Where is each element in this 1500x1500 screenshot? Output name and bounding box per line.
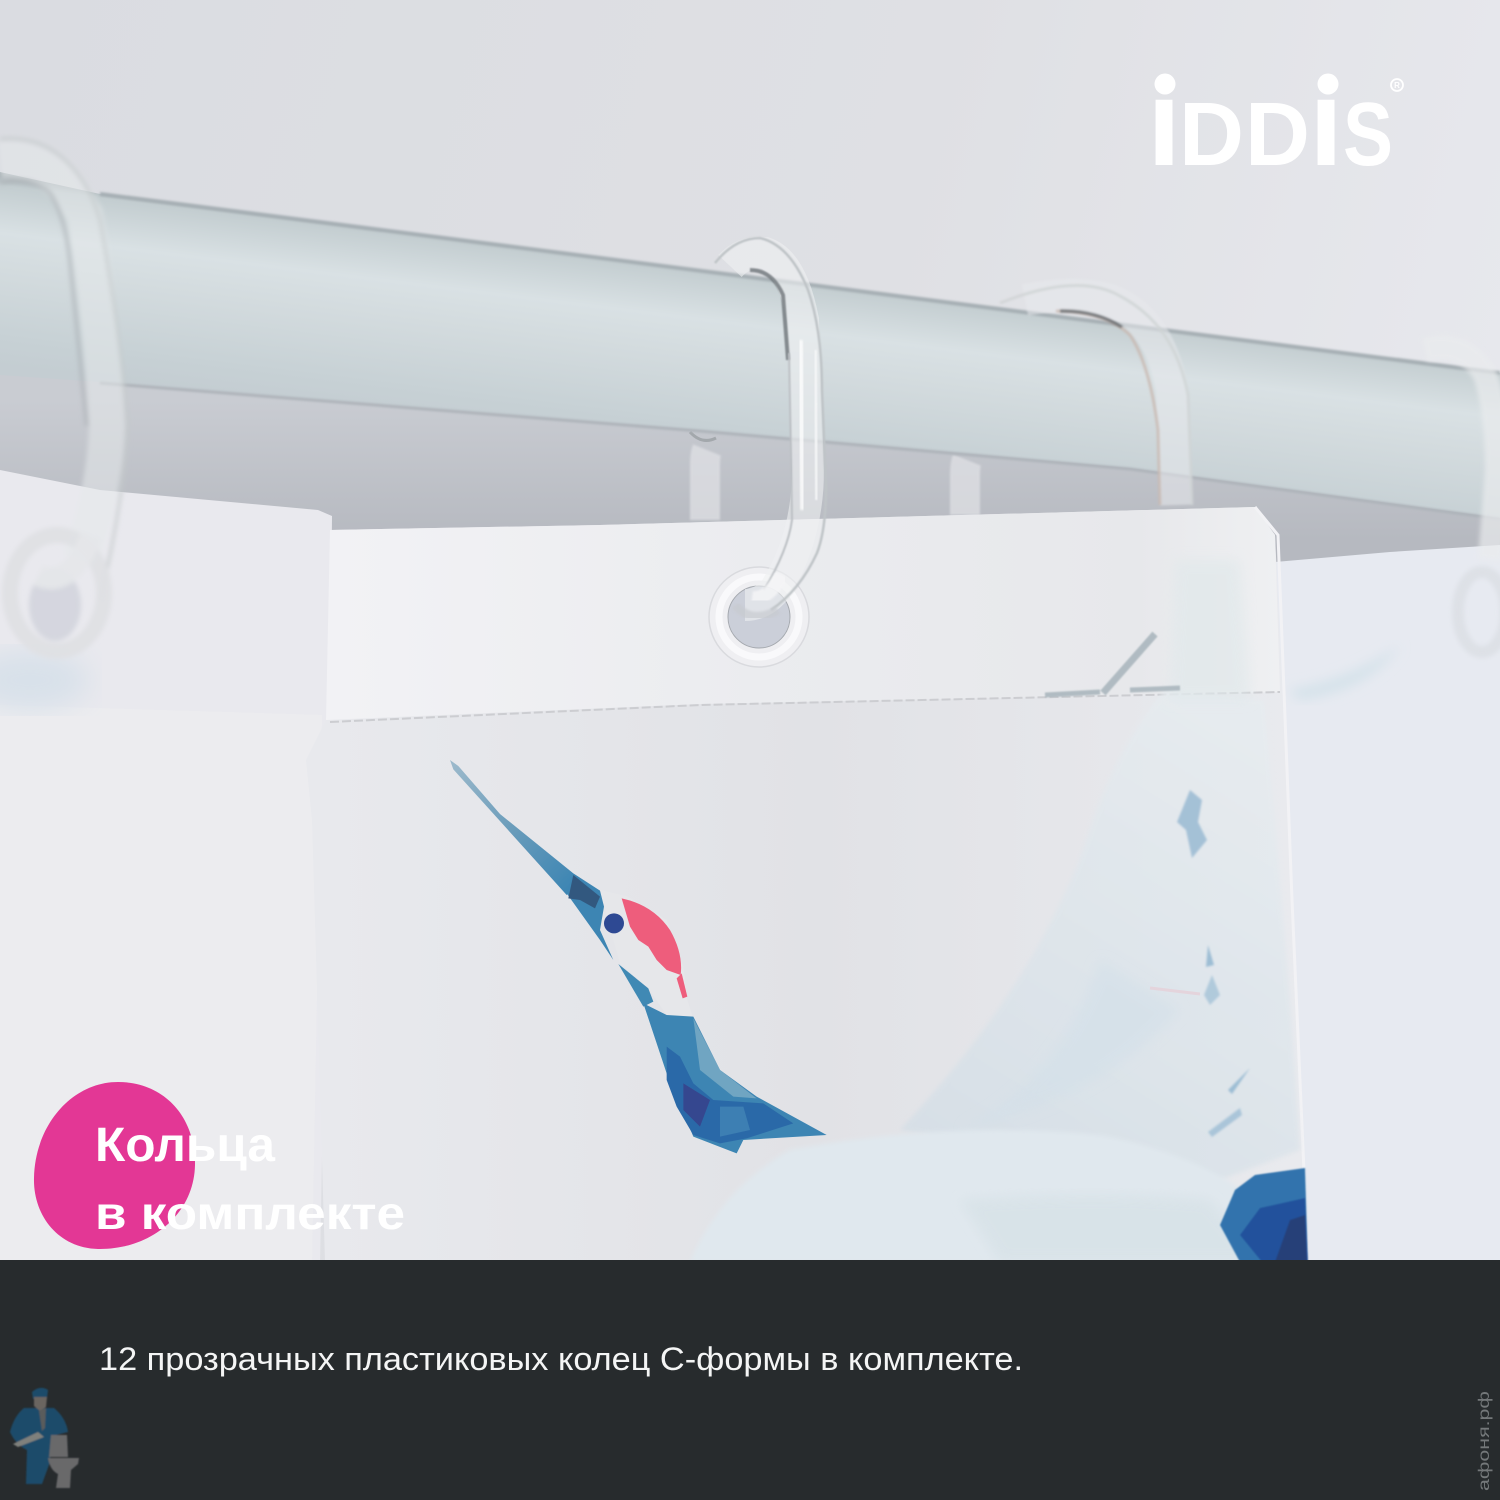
watermark: афоня.рф [1476, 1391, 1493, 1491]
logo: iDDiS: i [1309, 55, 1343, 192]
back ring hidden tip [690, 432, 716, 440]
crane wing tip print [1220, 1168, 1308, 1262]
lower neck [643, 1003, 827, 1153]
heading: rings included: Кольца [95, 1119, 275, 1172]
left grommet [10, 535, 104, 651]
crane head and neck [450, 760, 827, 1153]
left strip of head [567, 873, 613, 960]
crane body [690, 1130, 1305, 1262]
background curtain left [0, 470, 332, 1265]
ring: left blurred [0, 138, 128, 651]
background curtain right [1275, 545, 1500, 1265]
ring: main front [715, 238, 826, 616]
plumber [10, 1388, 68, 1484]
description text: 12 прозрачных пластиковых колец С-формы в комплекте. [99, 1341, 1023, 1377]
eye [604, 913, 624, 933]
print: wing [690, 560, 1305, 1262]
pink blob [34, 1082, 195, 1249]
logo: iDDiS: DD [1179, 85, 1310, 185]
red crest [622, 898, 681, 975]
icon: plumber with toilet [10, 1388, 79, 1488]
logo: iDDiS: R [1394, 81, 1400, 90]
wing shadow streaks [960, 960, 1180, 1130]
small ring ends behind the rod [705, 450, 967, 520]
main curtain [306, 507, 1308, 1262]
curtain rod [0, 172, 1500, 519]
dark blue lower neck patch [667, 1047, 793, 1143]
curtain hem [326, 507, 1280, 720]
hem stitching [330, 692, 1280, 722]
hem print mark [1045, 634, 1180, 695]
ring: right blurred [1425, 348, 1500, 652]
dark footer band [0, 1260, 1500, 1500]
pale head base [600, 890, 693, 1018]
logo: iDDiS: i [1147, 55, 1181, 192]
wing marks [1177, 790, 1250, 1137]
grommet: main ring [709, 567, 809, 667]
beak [450, 760, 575, 895]
heading: rings included: в комплекте [95, 1187, 405, 1239]
ring: third [1000, 286, 1192, 505]
heading: rings included [95, 1119, 405, 1239]
logo: iDDiS [1154, 74, 1404, 166]
toilet [48, 1435, 79, 1488]
dark eye mask [568, 875, 600, 908]
logo: iDDiS: S [1343, 85, 1393, 185]
shadow band behind the rod [0, 340, 1500, 600]
